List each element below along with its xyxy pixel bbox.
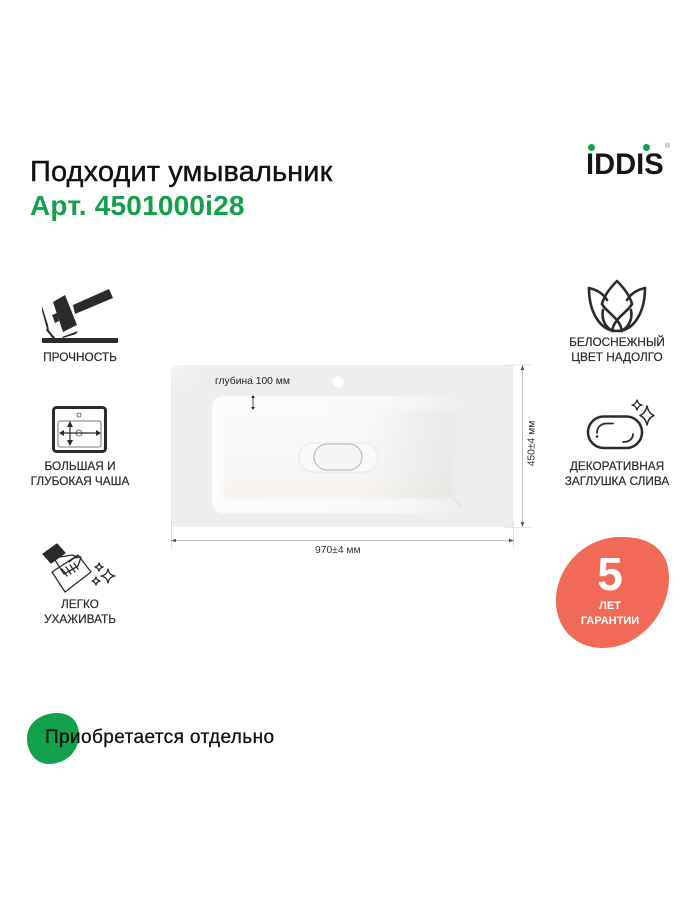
tap hole (332, 376, 344, 388)
height label: 450±4 мм (526, 421, 538, 466)
icon: lotus (589, 281, 645, 331)
icon: drain plug with sparkles (588, 400, 654, 448)
label: drain plug: ДЕКОРАТИВНАЯ (570, 459, 664, 473)
title: Подходит умывальник (30, 156, 332, 188)
icon: hand with cloth (43, 544, 115, 592)
note: Приобретается отдельно (45, 727, 274, 748)
width label: 970±4 мм (315, 545, 361, 556)
warranty text (581, 548, 639, 627)
label: strength: ПРОЧНОСТЬ (43, 350, 117, 364)
depth arrow (251, 395, 255, 410)
label: easy care (44, 597, 116, 626)
height dimension (505, 365, 531, 528)
label: white colour: ЦВЕТ НАДОЛГО (571, 350, 663, 364)
depth label: глубина 100 мм (215, 376, 290, 387)
label: drain plug: ЗАГЛУШКА СЛИВА (565, 474, 669, 488)
label: white colour: БЕЛОСНЕЖНЫЙ (569, 335, 665, 349)
width dimension (171, 521, 514, 548)
warranty blob (556, 537, 669, 648)
label: white colour (569, 334, 665, 364)
logo: IDDIS: IDDIS (586, 148, 664, 181)
warranty text: ЛЕТ (599, 600, 621, 612)
label: large bowl (31, 459, 130, 488)
label: easy care: УХАЖИВАТЬ (44, 612, 116, 626)
label: large bowl: БОЛЬШАЯ И (44, 459, 116, 473)
green blob (27, 713, 79, 764)
icon: hammer (42, 289, 118, 343)
label: easy care: ЛЕГКО (61, 597, 99, 611)
warranty text: ГАРАНТИИ (581, 615, 639, 627)
sink bowl (212, 396, 465, 513)
article number: Арт. 4501000i28 (30, 190, 245, 221)
warranty text: 5 (597, 548, 623, 600)
label: large bowl: ГЛУБОКАЯ ЧАША (31, 474, 129, 488)
drain (299, 443, 378, 472)
sink slab (171, 365, 513, 527)
logo: IDDIS: ® (665, 143, 670, 150)
label: drain plug (565, 459, 670, 488)
icon: large deep bowl (54, 408, 106, 452)
